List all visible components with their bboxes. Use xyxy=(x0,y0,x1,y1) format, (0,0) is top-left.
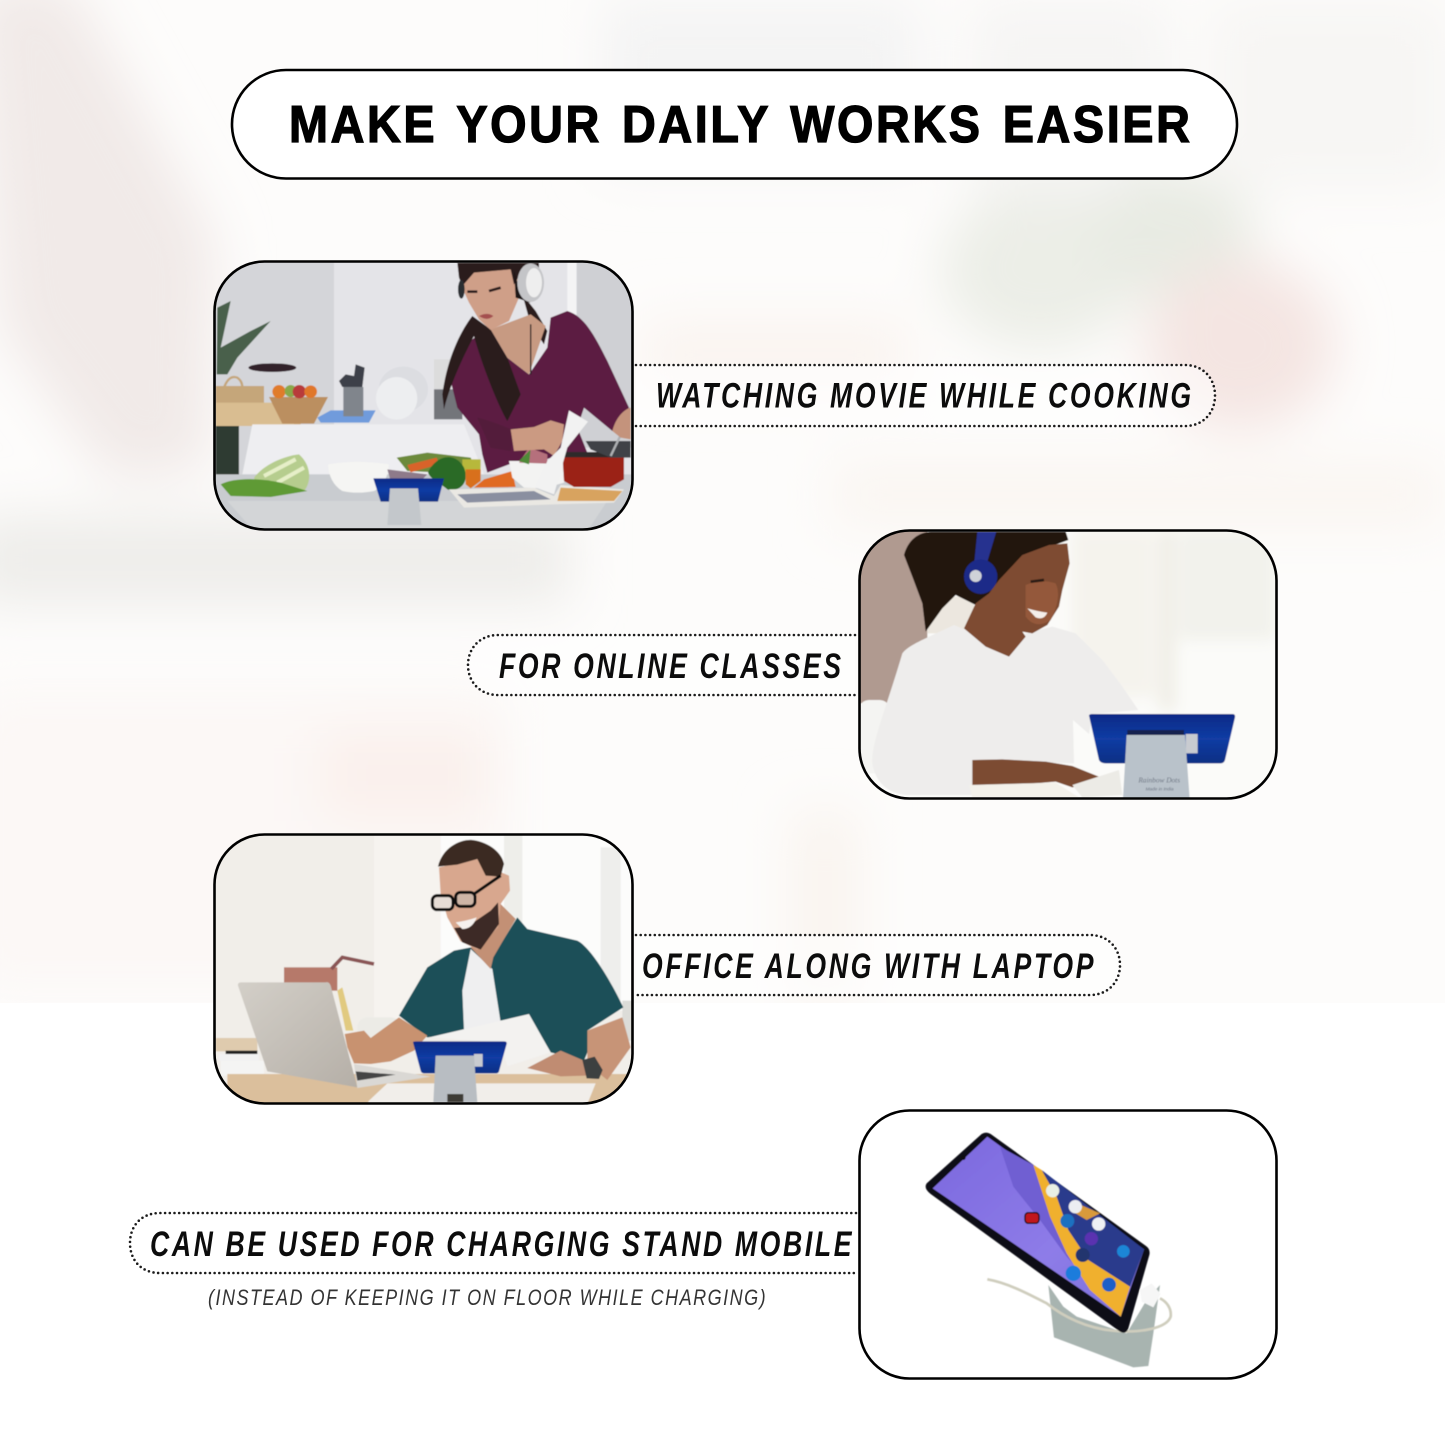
text: can be used for charging stand mobile: CAN BE USED FOR CHARGING STAND MOBILE xyxy=(150,1224,853,1264)
label: watching movie xyxy=(636,365,1215,426)
title pill xyxy=(232,70,1237,178)
text: for online classes: FOR ONLINE CLASSES xyxy=(499,646,841,686)
panel: online classes photo xyxy=(859,530,1279,800)
label: office laptop xyxy=(636,935,1120,995)
label: online classes xyxy=(468,635,855,695)
blurred kitchen background xyxy=(0,0,1445,1003)
text: watching movie while cooking: WATCHING MOVIE WHILE COOKING xyxy=(656,376,1191,415)
text: office along with laptop: OFFICE ALONG WITH LAPTOP xyxy=(642,946,1094,986)
text: charging note: (INSTEAD OF KEEPING IT ON FLOOR WHILE CHARGING) xyxy=(208,1286,766,1310)
title: MAKE YOUR DAILY WORKS EASIER xyxy=(289,96,1190,154)
label: charging stand xyxy=(130,1213,856,1273)
panel: charging stand photo xyxy=(860,1110,1276,1378)
panel: cooking photo xyxy=(214,261,634,531)
panel: office laptop photo xyxy=(214,834,634,1104)
panel: online classes photo: Made in India xyxy=(1146,787,1174,792)
panel: online classes photo: Rainbow Dots xyxy=(1137,776,1180,785)
